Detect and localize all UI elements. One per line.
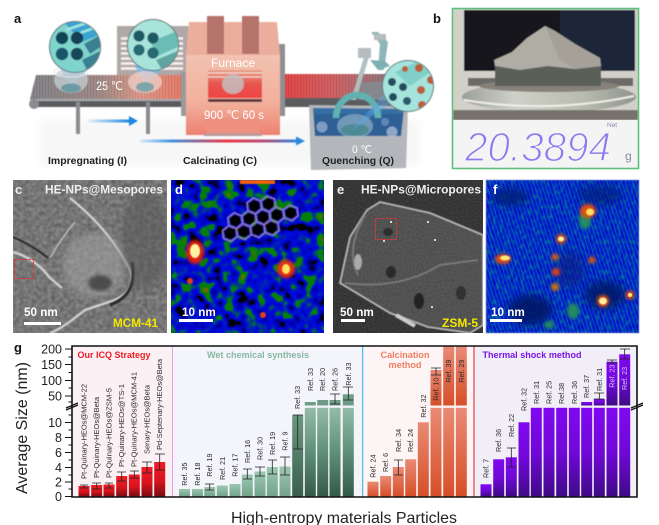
furnace label: Furnace: [211, 56, 255, 70]
axis break marks: [66, 403, 643, 410]
sample labels: Pt-Quinary-HEOs@Beta: [92, 396, 101, 478]
sample labels: Ref. 37: [582, 375, 591, 398]
conveyor belt right: [280, 74, 402, 107]
sample labels: Ref. 32: [520, 388, 528, 411]
y axis numbers: [41, 342, 62, 504]
dish 2 with cone and lens: [127, 19, 180, 93]
sample labels: Ref. 6: [381, 453, 390, 472]
panel a: impregnating, calcinating, quenching process: [14, 11, 435, 170]
sample labels: Pt-Quinary-HEOs@ZSM-5: [104, 388, 114, 478]
purple bars: thermal shock method: [480, 354, 630, 496]
sample labels: Ref. 26: [330, 368, 340, 391]
sample labels: Ref. 24: [368, 455, 378, 478]
error bars: [80, 349, 630, 490]
quenching bath: [309, 58, 435, 170]
group dividers: [172, 346, 174, 497]
panel label g: g: [14, 340, 22, 355]
balance display: [453, 120, 638, 168]
sample labels: Pt-Quinary-HEOs@MCM-41: [130, 372, 139, 467]
label f: f: [493, 182, 498, 197]
divider calcination and thermal: [473, 346, 475, 497]
scale bar 50 nm: 50 nm: [24, 306, 58, 319]
photo: [453, 9, 638, 120]
group title: wet chemical synthesis: Wet chemical synthesis: [207, 350, 309, 360]
heat map: [171, 180, 324, 333]
step label impregnating: Impregnating (I): [48, 156, 127, 167]
sample labels: Ref. 32: [419, 395, 428, 418]
label d: d: [175, 182, 183, 197]
red selection box: [14, 260, 34, 278]
scale bar 50 nm: 50 nm: [340, 306, 374, 319]
balance reading: 20.3894: [464, 124, 611, 170]
sample labels: Ref. 33: [344, 363, 353, 386]
y axis numbers: 150: [41, 358, 62, 372]
temperature label 900 C 60 s: 900 ℃ 60 s: [204, 108, 264, 122]
sample labels: Ref. 17: [230, 454, 240, 477]
background and zeolite particle: [333, 180, 483, 333]
small process arrow: [88, 116, 138, 126]
sample labels: Pt-Quinary-HEOs@MCM-22: [80, 384, 88, 479]
y axis ticks: [65, 349, 72, 496]
sample labels: Ref. 20: [318, 368, 327, 391]
conveyor belt left: [29, 75, 183, 134]
unit g: g: [625, 149, 632, 163]
label c: c: [15, 182, 22, 197]
sample labels: Ref. 36: [570, 381, 579, 404]
panel e: HE-NPs at micropores micrograph: [333, 180, 483, 333]
heat map: [486, 180, 639, 333]
y axis numbers: 100: [41, 374, 62, 388]
green frame: [452, 8, 638, 168]
floor shading: [40, 120, 420, 166]
panel d: mesopore heat map: [171, 180, 324, 333]
sample labels: Ref. 7: [482, 459, 490, 478]
sample labels: Ref. 23: [608, 365, 616, 388]
y axis numbers: 6: [55, 446, 62, 460]
group title: thermal shock method: Thermal shock method: [482, 350, 582, 360]
sample labels: Ref. 33: [293, 386, 302, 409]
panel c: HE-NPs at mesopores micrograph: [13, 180, 169, 333]
micrograph texture: [13, 180, 169, 333]
sample labels: Ref. 24: [406, 429, 415, 452]
sample labels: Ref. 10: [432, 378, 440, 401]
sample labels: Ref. 36: [494, 429, 503, 452]
heading micropores: HE-NPs@Micropores: [361, 182, 481, 196]
panel g: average size bar chart: [14, 340, 643, 525]
robot arm: [351, 32, 392, 100]
sample labels: Senary-HEOs@Beta: [142, 384, 152, 454]
red bars: our ICQ strategy: [78, 462, 165, 496]
sample labels: Ref. 31: [595, 368, 604, 391]
group title: method: method: [388, 360, 422, 370]
sample labels: Ref. 21: [218, 457, 227, 480]
sample labels: Ref. 23: [620, 367, 629, 390]
y axis numbers: 50: [48, 390, 62, 404]
y axis numbers: 0: [55, 490, 62, 504]
group title: our ICQ strategy: Our ICQ Strategy: [78, 350, 151, 360]
honeycomb overlay: [219, 192, 300, 242]
category backgrounds: [72, 346, 637, 497]
scale bar 10 nm: 10 nm: [182, 306, 216, 319]
red selection box: [376, 218, 396, 240]
sample labels: Pt-Quinary-HEOs@TS-1: [117, 384, 126, 467]
sample labels: Ref. 31: [532, 381, 541, 404]
sample MCM-41: MCM-41: [113, 317, 158, 330]
sample labels: Ref. 18: [193, 463, 202, 486]
sample labels: Ref. 19: [205, 454, 214, 477]
sample labels: Ref. 33: [306, 368, 315, 391]
y axis numbers: 10: [48, 416, 62, 430]
label e: e: [337, 182, 344, 197]
furnace: [181, 16, 285, 136]
panel label a: a: [14, 11, 22, 26]
y axis numbers: 2: [55, 476, 62, 490]
sample labels: Ref. 29: [457, 360, 466, 383]
sample labels: Pd-Septenary-HEOs@Beta: [155, 358, 164, 450]
sample labels: Ref. 25: [544, 381, 554, 404]
sample labels: Ref. 22: [507, 414, 516, 437]
panel label b: b: [433, 11, 441, 26]
divider wet and calcination: [362, 346, 364, 497]
sample labels: Ref. 9: [280, 432, 290, 451]
sample labels: Ref. 19: [268, 432, 277, 455]
frame: [486, 180, 639, 333]
heading mesopores: HE-NPs@Mesopores: [45, 182, 163, 196]
back panel with vents: [117, 26, 189, 76]
sample labels: Ref. 16: [243, 440, 252, 463]
sample labels: [80, 358, 629, 486]
sample labels: Ref. 35: [180, 463, 189, 486]
calcinating gradient arrow: [140, 136, 305, 146]
sample labels: Ref. 39: [444, 360, 453, 383]
group title: calcination method: Calcination: [380, 350, 430, 360]
net label: Net: [607, 122, 617, 129]
y axis numbers: 8: [55, 431, 62, 445]
orange bars: calcination method: [368, 346, 467, 496]
dish 1 with cone and lens: [49, 19, 102, 93]
scale bar 10 nm: 10 nm: [491, 306, 525, 319]
panel b: powder on balance photo: [433, 8, 638, 170]
y axis numbers: 200: [41, 342, 62, 356]
0 C label: 0 ℃: [352, 144, 372, 156]
sample labels: Ref.38: [557, 383, 566, 404]
sample labels: Ref. 30: [256, 437, 264, 460]
step label quenching: Quenching (Q): [322, 156, 394, 167]
green bars: wet chemical synthesis: [179, 394, 354, 496]
y axis title: Average Size (nm): [14, 362, 31, 494]
chart frame: [72, 346, 637, 497]
temperature label 25 C: 25 ℃: [96, 79, 123, 93]
scale bar 50 nm: [24, 306, 61, 325]
sample labels: Ref. 34: [394, 429, 403, 452]
step label calcinating: Calcinating (C): [183, 156, 257, 167]
sample ZSM-5: ZSM-5: [442, 317, 479, 330]
y axis numbers: 4: [55, 461, 62, 475]
panel f: micropore heat map: [486, 180, 639, 333]
